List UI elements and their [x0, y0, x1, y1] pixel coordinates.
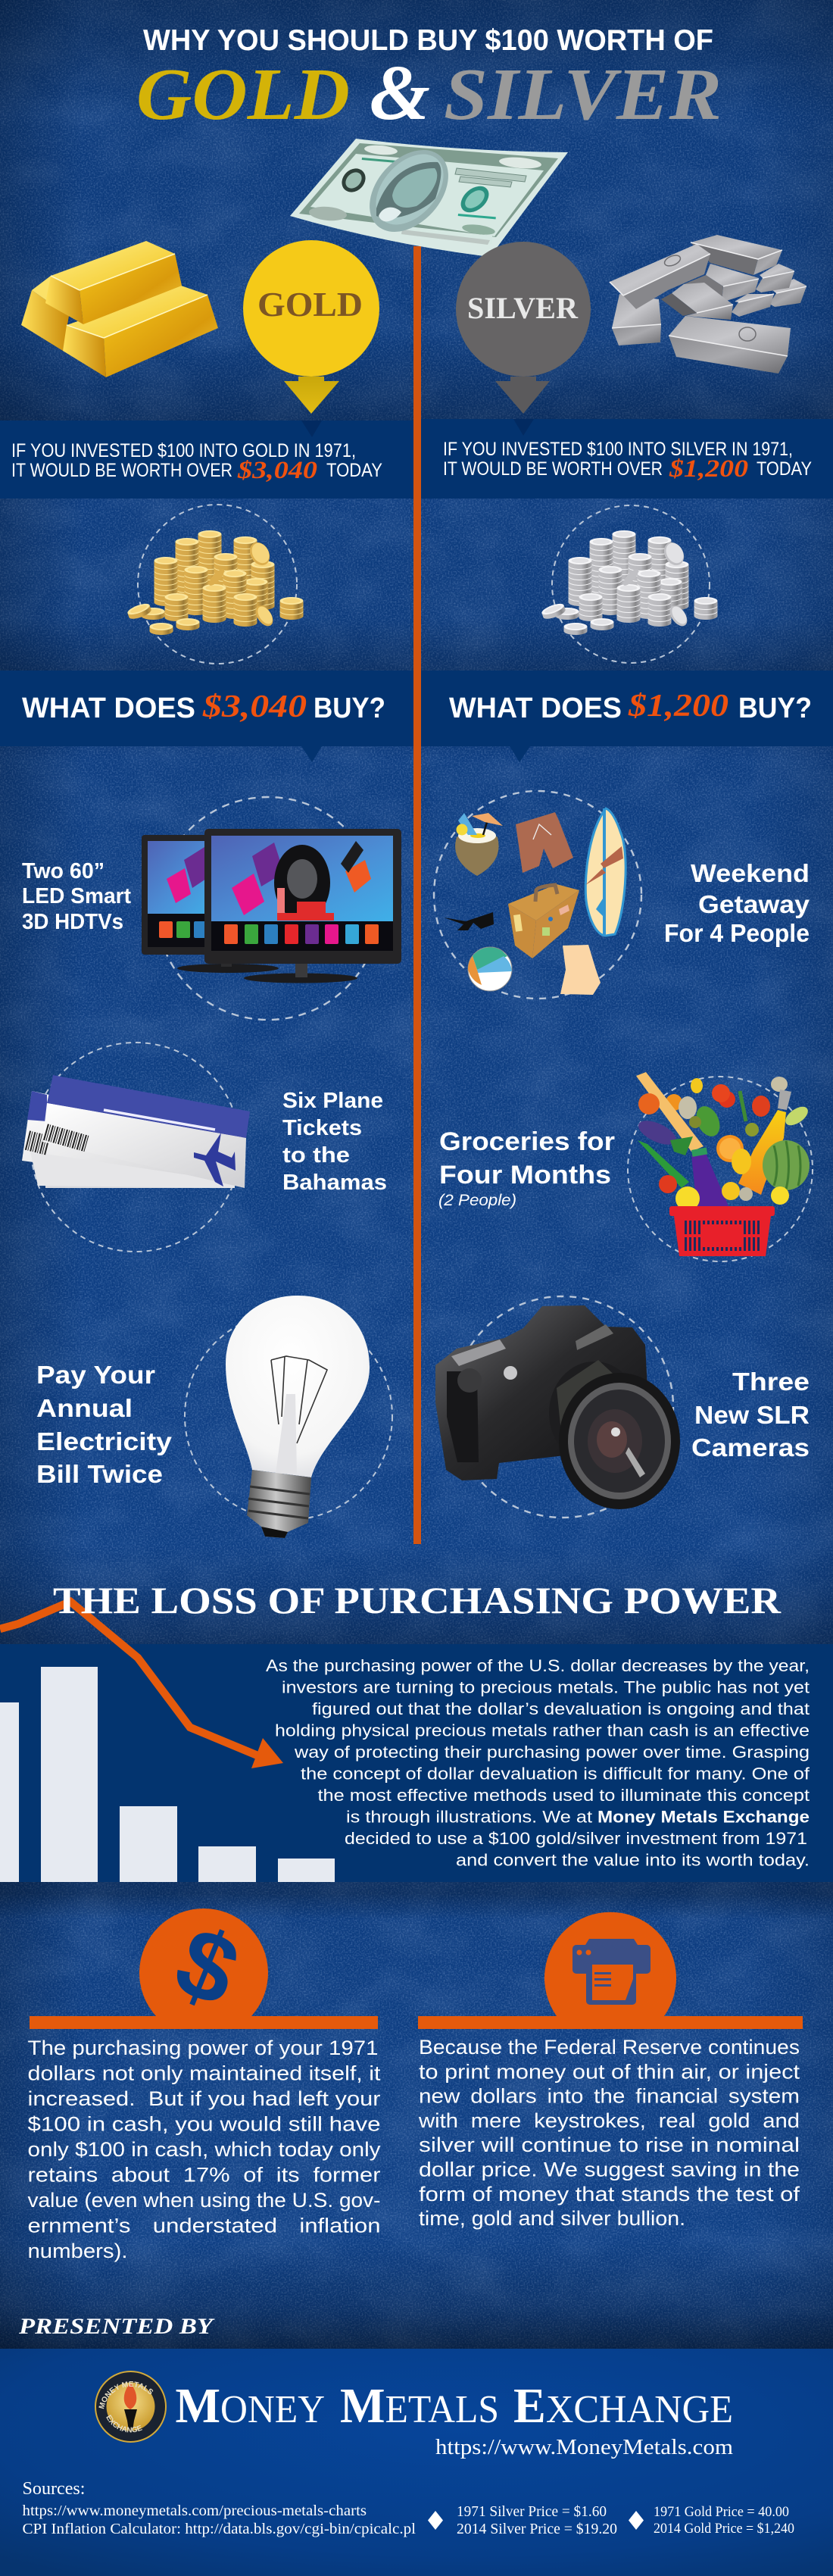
text: printer paragraph: Because the Federal Reserve continues: [419, 2036, 800, 2059]
band: what does gold buy: [0, 671, 413, 762]
band: what does silver buy: [421, 671, 833, 762]
text: purchasing power paragraph: [266, 1656, 810, 1870]
text: camera label: Three: [732, 1368, 810, 1396]
text: gold prices: [654, 2504, 794, 2537]
text: website url: https://www.MoneyMetals.com: [435, 2435, 733, 2459]
icon: money printer: [418, 1912, 803, 2029]
text: dollar paragraph: numbers).: [27, 2240, 127, 2262]
text: groceries label: Groceries for: [439, 1127, 615, 1156]
text: getaway label: For 4 People: [664, 919, 810, 947]
text: silver prices: 2014 Silver Price = $19.20: [457, 2521, 617, 2537]
text: printer paragraph: time, gold and silver bullion.: [419, 2207, 685, 2230]
text: gold prices: 2014 Gold Price = $1,240: [654, 2521, 794, 2537]
icon: swim shorts: [516, 812, 573, 873]
title ampersand: &: [370, 49, 430, 136]
text: today: TODAY: [326, 460, 382, 481]
panel: printer column: [418, 1912, 803, 2230]
text: buy: BUY?: [314, 692, 385, 724]
text: buy: BUY?: [738, 692, 812, 724]
text: tickets label: to the: [282, 1143, 350, 1168]
text: dollar paragraph: dollars not only maintained itself, it: [27, 2062, 381, 2085]
icon: front tv: [204, 829, 401, 983]
text: hdtv label: Two 60”: [22, 859, 105, 883]
silver circle badge: [456, 242, 591, 377]
text: amount 1,200: $1,200: [628, 689, 728, 724]
icon: suitcase: [508, 884, 579, 958]
text: dollar paragraph: increased. But if you had left your: [27, 2087, 381, 2110]
text: sources: https://www.moneymetals.com/precious-metals-charts: [23, 2503, 367, 2519]
silver circle badge: SILVER: [467, 291, 579, 325]
text: camera label: [691, 1368, 810, 1462]
text: camera label: Cameras: [691, 1433, 810, 1462]
icon: dollar circle: [30, 1905, 378, 2029]
text: purchasing power paragraph: the most effective methods used to illuminate this concept: [318, 1786, 810, 1805]
text: gold line two: IT WOULD BE WORTH OVER: [11, 460, 232, 481]
panel: footer: [0, 2349, 833, 2576]
icon: light bulb: [226, 1296, 370, 1538]
text: dollar paragraph: only $100 in cash, which today only: [27, 2138, 381, 2161]
text: purchasing power paragraph: holding physical precious metals rather than cash is an effective: [275, 1721, 810, 1740]
icon: gold bars: [21, 241, 218, 377]
text: silver prices: 1971 Silver Price = $1.60: [457, 2503, 607, 2520]
title word: gold: GOLD: [136, 54, 350, 135]
text: today: TODAY: [757, 458, 812, 480]
text: purchasing power paragraph: Money Metals Exchange: [597, 1808, 810, 1826]
text: printer paragraph: form of money that stands the test of: [419, 2183, 800, 2206]
text: electricity label: [36, 1361, 173, 1488]
title: [136, 24, 722, 136]
text: purchasing power paragraph: investors are turning to precious metals. The public has not yet: [282, 1677, 810, 1697]
icon: silver bars: [610, 235, 806, 374]
text: electricity label: Bill Twice: [36, 1460, 163, 1488]
panel: weekend getaway: [434, 791, 810, 999]
icon: tickets: [22, 1075, 250, 1188]
title line: why you should: WHY YOU SHOULD BUY $100 WORTH OF: [143, 24, 713, 57]
icon: silver coins: [541, 505, 718, 663]
band: paragraph background: [0, 1644, 833, 1882]
text: printer paragraph: new dollars into the financial system: [419, 2085, 800, 2108]
icon: money metals logo: [95, 2371, 167, 2443]
text: tickets label: [282, 1089, 387, 1195]
text: printer paragraph: dollar price. We suggest saving in the: [419, 2158, 800, 2181]
text: tickets label: Bahamas: [282, 1171, 387, 1195]
text: hdtv label: LED Smart: [22, 884, 131, 908]
arrow: silver down: [495, 377, 550, 414]
icon: towel: [560, 945, 601, 995]
gold circle badge: GOLD: [257, 285, 363, 324]
band: gold value: [0, 420, 413, 499]
text: dollar paragraph: [27, 2037, 381, 2262]
text: sources: Sources:: [23, 2479, 85, 2499]
text: groceries label: (2 People): [438, 1192, 516, 1209]
text: printer paragraph: [418, 2036, 800, 2230]
center orange divider: [413, 246, 421, 1544]
text: what does: WHAT DOES: [22, 692, 195, 724]
text: sources: [23, 2479, 416, 2537]
bar chart: [0, 1667, 335, 1882]
text: purchasing power paragraph: As the purchasing power of the U.S. dollar decreases by the year,: [266, 1656, 810, 1675]
text: camera label: New SLR: [694, 1401, 810, 1429]
text: electricity label: Pay Your: [36, 1361, 155, 1389]
icon: gold coins: [126, 505, 303, 664]
heading: presented by: PRESENTED BY: [18, 2314, 215, 2339]
icon: money metals logo: EXCHANGE: [106, 2415, 142, 2432]
text: printer paragraph: to print money out of thin air, or inject: [419, 2060, 800, 2083]
icon: diamond separator: [629, 2511, 644, 2530]
text: getaway label: Getaway: [698, 890, 810, 918]
icon: grocery basket: [635, 1072, 811, 1256]
text: purchasing power paragraph: is through illustrations. We at: [346, 1808, 593, 1826]
text: hdtv label: 3D HDTVs: [22, 910, 123, 934]
icon: back tv: [142, 835, 279, 973]
text: electricity label: Annual: [36, 1394, 133, 1422]
panel: gold invest: [0, 240, 413, 499]
text: groceries label: Four Months: [439, 1161, 611, 1190]
text: money metals exchange wordmark: [176, 2378, 733, 2434]
arrow: falling line: [0, 1602, 283, 1768]
text: getaway label: [664, 859, 810, 947]
text: purchasing power paragraph: and convert the value into its worth today.: [456, 1850, 810, 1870]
panel: electricity: [36, 1296, 392, 1538]
text: purchasing power paragraph: way of protecting their purchasing power over time. Grasping: [294, 1743, 810, 1762]
text: sources: CPI Inflation Calculator: http://data.bls.gov/cgi-bin/cpicalc.pl: [23, 2521, 416, 2537]
text: printer paragraph: with mere keystrokes, real gold and: [418, 2109, 800, 2132]
text: gold amount: $3,040: [237, 457, 317, 484]
text: money metals exchange wordmark: EXCHANGE: [513, 2378, 733, 2434]
text: printer paragraph: silver will continue to rise in nominal: [419, 2134, 800, 2156]
icon: slr camera: [435, 1305, 680, 1509]
gold circle badge: [243, 240, 379, 377]
icon: dollar circle: $: [161, 1905, 254, 2027]
panel: groceries: [438, 1072, 813, 1261]
panel: dollar column: [27, 1905, 381, 2262]
icon: beach ball: [468, 947, 512, 991]
text: electricity label: Electricity: [36, 1427, 173, 1455]
text: purchasing power paragraph: figured out that the dollar’s devaluation is ongoing and that: [312, 1699, 810, 1718]
text: purchasing power paragraph: the concept of dollar devaluation is difficult for many. One of: [301, 1764, 810, 1784]
icon: diamond separator: [428, 2511, 443, 2530]
text: money metals exchange wordmark: MONEY: [176, 2378, 325, 2434]
band: silver value: [421, 419, 833, 499]
panel: cameras: [435, 1296, 810, 1518]
panel: hdtvs: [22, 797, 401, 1020]
arrow: gold down: [284, 377, 339, 414]
text: tickets label: Tickets: [282, 1116, 362, 1140]
text: dollar paragraph: ernment’s understated inflation: [27, 2214, 380, 2237]
text: gold line one: IF YOU INVESTED $100 INTO GOLD IN 1971,: [11, 440, 356, 461]
text: silver line two: IT WOULD BE WORTH OVER: [443, 458, 663, 480]
text: hdtv label: [22, 859, 131, 934]
icon: sunglasses: [444, 912, 494, 930]
icon: surfboard: [585, 808, 626, 936]
text: groceries label: [438, 1127, 615, 1209]
text: silver amount: $1,200: [669, 455, 748, 483]
heading: loss of purchasing power: THE LOSS OF PURCHASING POWER: [53, 1579, 782, 1621]
text: silver prices: [457, 2503, 617, 2537]
text: dollar paragraph: value (even when using the U.S. gov-: [27, 2189, 380, 2212]
text: dollar paragraph: retains about 17% of its former: [27, 2164, 380, 2187]
text: getaway label: Weekend: [691, 859, 810, 887]
icon: coconut drink: [455, 813, 503, 876]
icon: hundred dollar bill: [290, 135, 568, 257]
text: money metals exchange wordmark: METALS: [340, 2378, 499, 2434]
panel: plane tickets: [22, 1043, 387, 1252]
text: dollar paragraph: $100 in cash, you would still have: [27, 2112, 380, 2135]
text: dollar paragraph: The purchasing power of your 1971: [27, 2037, 379, 2059]
text: purchasing power paragraph: decided to use a $100 gold/silver investment from 1971: [345, 1829, 807, 1848]
panel: loss of purchasing power: [0, 1579, 833, 1882]
text: gold prices: 1971 Gold Price = 40.00: [654, 2504, 789, 2520]
title word: silver: SILVER: [444, 54, 722, 135]
text: tickets label: Six Plane: [282, 1089, 383, 1113]
icon: money metals logo: MONEY METALS: [98, 2381, 153, 2409]
text: amount 3,040: $3,040: [202, 689, 307, 724]
text: what does: WHAT DOES: [449, 692, 622, 724]
panel: silver invest: [421, 235, 833, 499]
